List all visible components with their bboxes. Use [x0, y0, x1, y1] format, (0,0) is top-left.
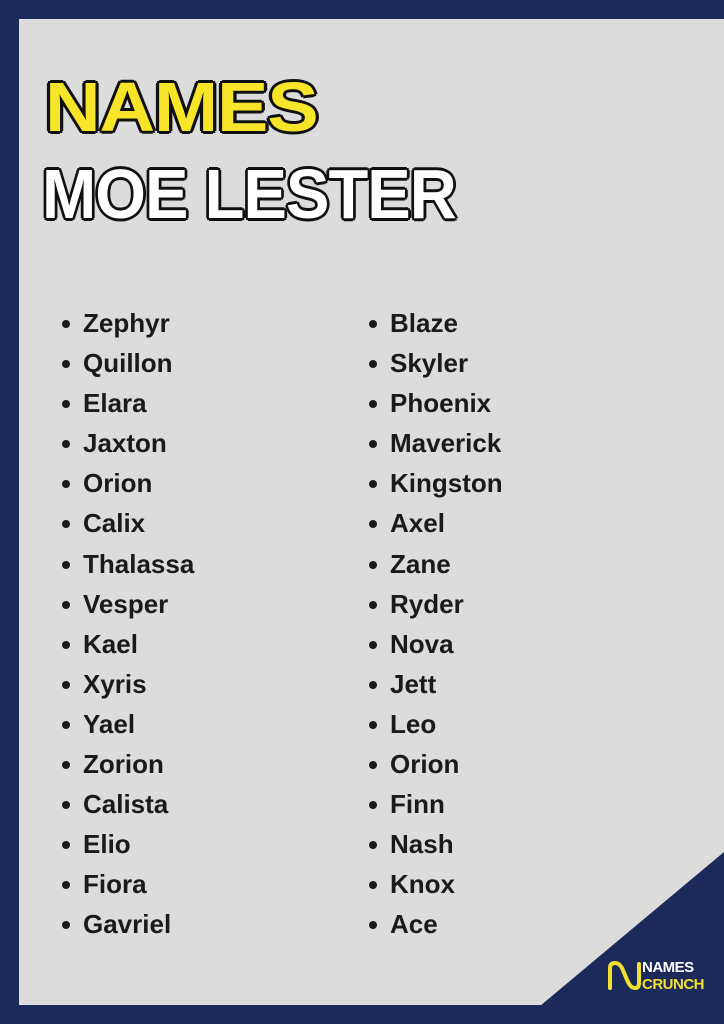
list: left column: Zorion — [83, 749, 164, 779]
list: right column: Nash — [390, 829, 454, 859]
list: left column — [62, 308, 194, 939]
list: right column: Kingston — [390, 468, 503, 498]
list: left column: Xyris — [83, 669, 147, 699]
list: left column: Calista — [83, 789, 168, 819]
list: right column: Jett — [390, 669, 436, 699]
list: right column: Zane — [390, 549, 451, 579]
logo: names crunch: CRUNCH — [642, 976, 704, 993]
list: right column: Phoenix — [390, 388, 491, 418]
list: left column: Elara — [83, 388, 147, 418]
list: right column: Knox — [390, 869, 455, 899]
icon: N logo — [608, 961, 641, 990]
list: right column: Leo — [390, 709, 436, 739]
list: left column: Elio — [83, 829, 131, 859]
list: left column: Kael — [83, 629, 138, 659]
list: left column: Vesper — [83, 589, 168, 619]
list: left column: Thalassa — [83, 549, 194, 579]
list: right column — [369, 308, 503, 939]
list: right column: Finn — [390, 789, 445, 819]
list: right column: Orion — [390, 749, 459, 779]
list: left column: Fiora — [83, 869, 147, 899]
list: left column: Gavriel — [83, 909, 171, 939]
logo text: NAMES — [642, 959, 694, 976]
list: left column: Calix — [83, 508, 145, 538]
list: left column: Zephyr — [83, 308, 170, 338]
title: NAMES: NAMES — [45, 68, 318, 146]
list: right column: Axel — [390, 508, 445, 538]
list: left column: Orion — [83, 468, 152, 498]
title: MOE LESTER: MOE LESTER — [42, 155, 456, 233]
list: right column: Skyler — [390, 348, 468, 378]
logo: names crunch — [608, 959, 704, 993]
list: left column: Jaxton — [83, 428, 167, 458]
list: left column: Yael — [83, 709, 135, 739]
list: right column: Blaze — [390, 308, 458, 338]
list: right column: Ace — [390, 909, 438, 939]
list: right column: Nova — [390, 629, 454, 659]
list: right column: Maverick — [390, 428, 501, 458]
list: right column: Ryder — [390, 589, 464, 619]
list: left column: Quillon — [83, 348, 173, 378]
